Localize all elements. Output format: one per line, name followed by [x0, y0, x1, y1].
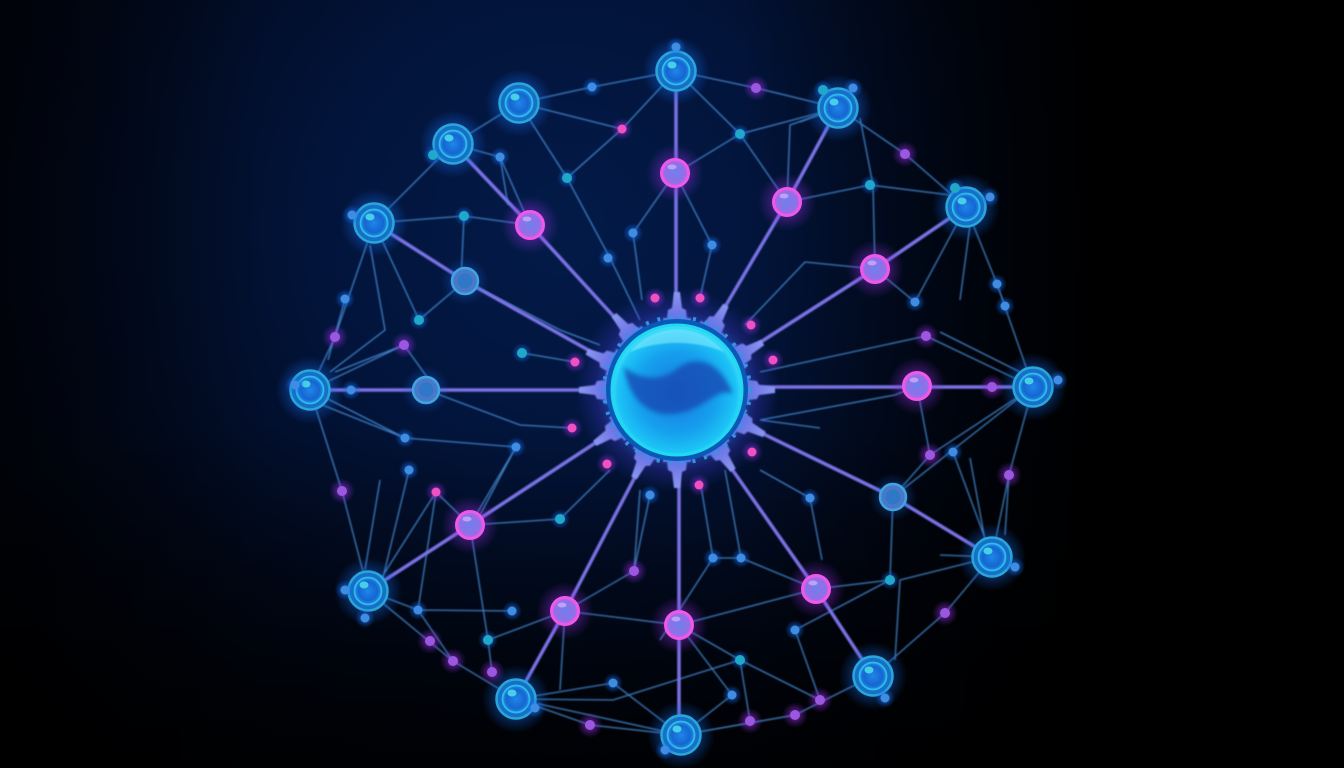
spoke connectors around core [579, 292, 775, 488]
mid blue nodes [402, 257, 917, 521]
small satellite dots [335, 77, 1015, 705]
magenta ring nodes [441, 144, 946, 654]
small magenta dots [322, 75, 1022, 738]
node satellite beads [285, 37, 1068, 760]
outer blue nodes [276, 37, 1067, 768]
central core orb [575, 288, 779, 492]
thick spokes from core [310, 91, 1033, 735]
thin connector lines [310, 71, 1033, 735]
